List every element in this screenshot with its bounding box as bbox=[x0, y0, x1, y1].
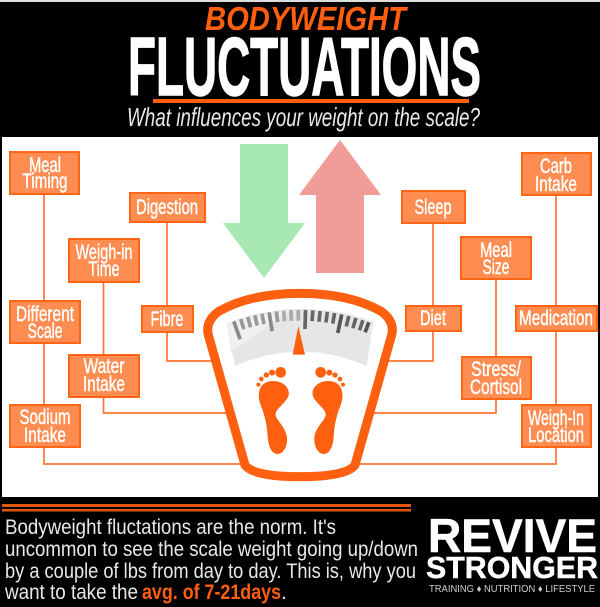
scale icon bbox=[208, 293, 392, 477]
box: fibre: Fibre bbox=[150, 308, 184, 331]
footer text: . bbox=[281, 581, 287, 604]
logo: revive stronger: REVIVE bbox=[428, 509, 597, 562]
box: different scale bbox=[10, 301, 80, 343]
footer double rule bbox=[2, 504, 411, 512]
footer text: Bodyweight fluctations are the norm. It's bbox=[5, 516, 336, 539]
box: weigh-in time: Weigh-in bbox=[76, 241, 132, 264]
box: sleep: Sleep bbox=[414, 196, 452, 219]
box: digestion: Digestion bbox=[136, 196, 198, 219]
box: sleep bbox=[402, 191, 465, 223]
white panel bbox=[2, 137, 598, 497]
box: water intake bbox=[69, 355, 139, 397]
title: bodyweight: BODYWEIGHT bbox=[205, 0, 409, 37]
title underline bbox=[153, 99, 469, 103]
dial face bbox=[227, 309, 373, 366]
footer text: want to take the bbox=[4, 581, 138, 604]
box: different scale: Different bbox=[16, 303, 74, 326]
footer text bbox=[4, 516, 418, 604]
arrow: down green bbox=[223, 144, 305, 278]
box: different scale: Scale bbox=[28, 320, 62, 343]
box: carb intake: Intake bbox=[535, 173, 577, 196]
box: sodium intake: Intake bbox=[24, 424, 66, 447]
box: fibre bbox=[142, 306, 193, 332]
box: meal timing: Meal bbox=[29, 154, 61, 177]
logo: revive stronger: STRONGER bbox=[426, 550, 598, 585]
subtitle: What influences your weight on the scale? bbox=[127, 102, 480, 132]
box: water intake: Water bbox=[84, 355, 124, 378]
right foot bbox=[312, 367, 345, 454]
box: stress cortisol: Cortisol bbox=[470, 376, 522, 399]
connector lines bbox=[44, 194, 556, 464]
box: weigh-in time bbox=[69, 239, 139, 282]
arrow: up red bbox=[299, 140, 381, 273]
box: meal size bbox=[461, 237, 531, 279]
footer text: by a couple of lbs from day to day. This is, why you bbox=[5, 560, 416, 583]
left foot bbox=[256, 367, 289, 454]
footer text: uncommon to see the scale weight going up/down bbox=[5, 538, 418, 561]
dial needle bbox=[293, 326, 305, 355]
dial ticks bbox=[234, 310, 369, 339]
box: digestion bbox=[130, 193, 205, 222]
box: weigh-in time: Time bbox=[88, 258, 120, 281]
box: stress cortisol bbox=[462, 357, 531, 399]
box: diet: Diet bbox=[420, 307, 446, 330]
logo: revive stronger bbox=[426, 509, 598, 595]
box: stress cortisol: Stress/ bbox=[471, 358, 521, 381]
box: meal size: Size bbox=[482, 256, 510, 279]
box: weigh-in location bbox=[522, 405, 591, 447]
box: meal timing bbox=[10, 152, 79, 194]
footer text: avg. of 7-21days bbox=[142, 581, 281, 604]
box: water intake: Intake bbox=[83, 373, 125, 396]
box: meal timing: Timing bbox=[22, 170, 68, 193]
box: diet bbox=[406, 306, 461, 331]
box: carb intake: Carb bbox=[540, 155, 572, 178]
box: meal size: Meal bbox=[480, 239, 512, 262]
box: carb intake bbox=[522, 153, 591, 196]
box: sodium intake bbox=[10, 405, 80, 447]
box: sodium intake: Sodium bbox=[20, 406, 70, 429]
